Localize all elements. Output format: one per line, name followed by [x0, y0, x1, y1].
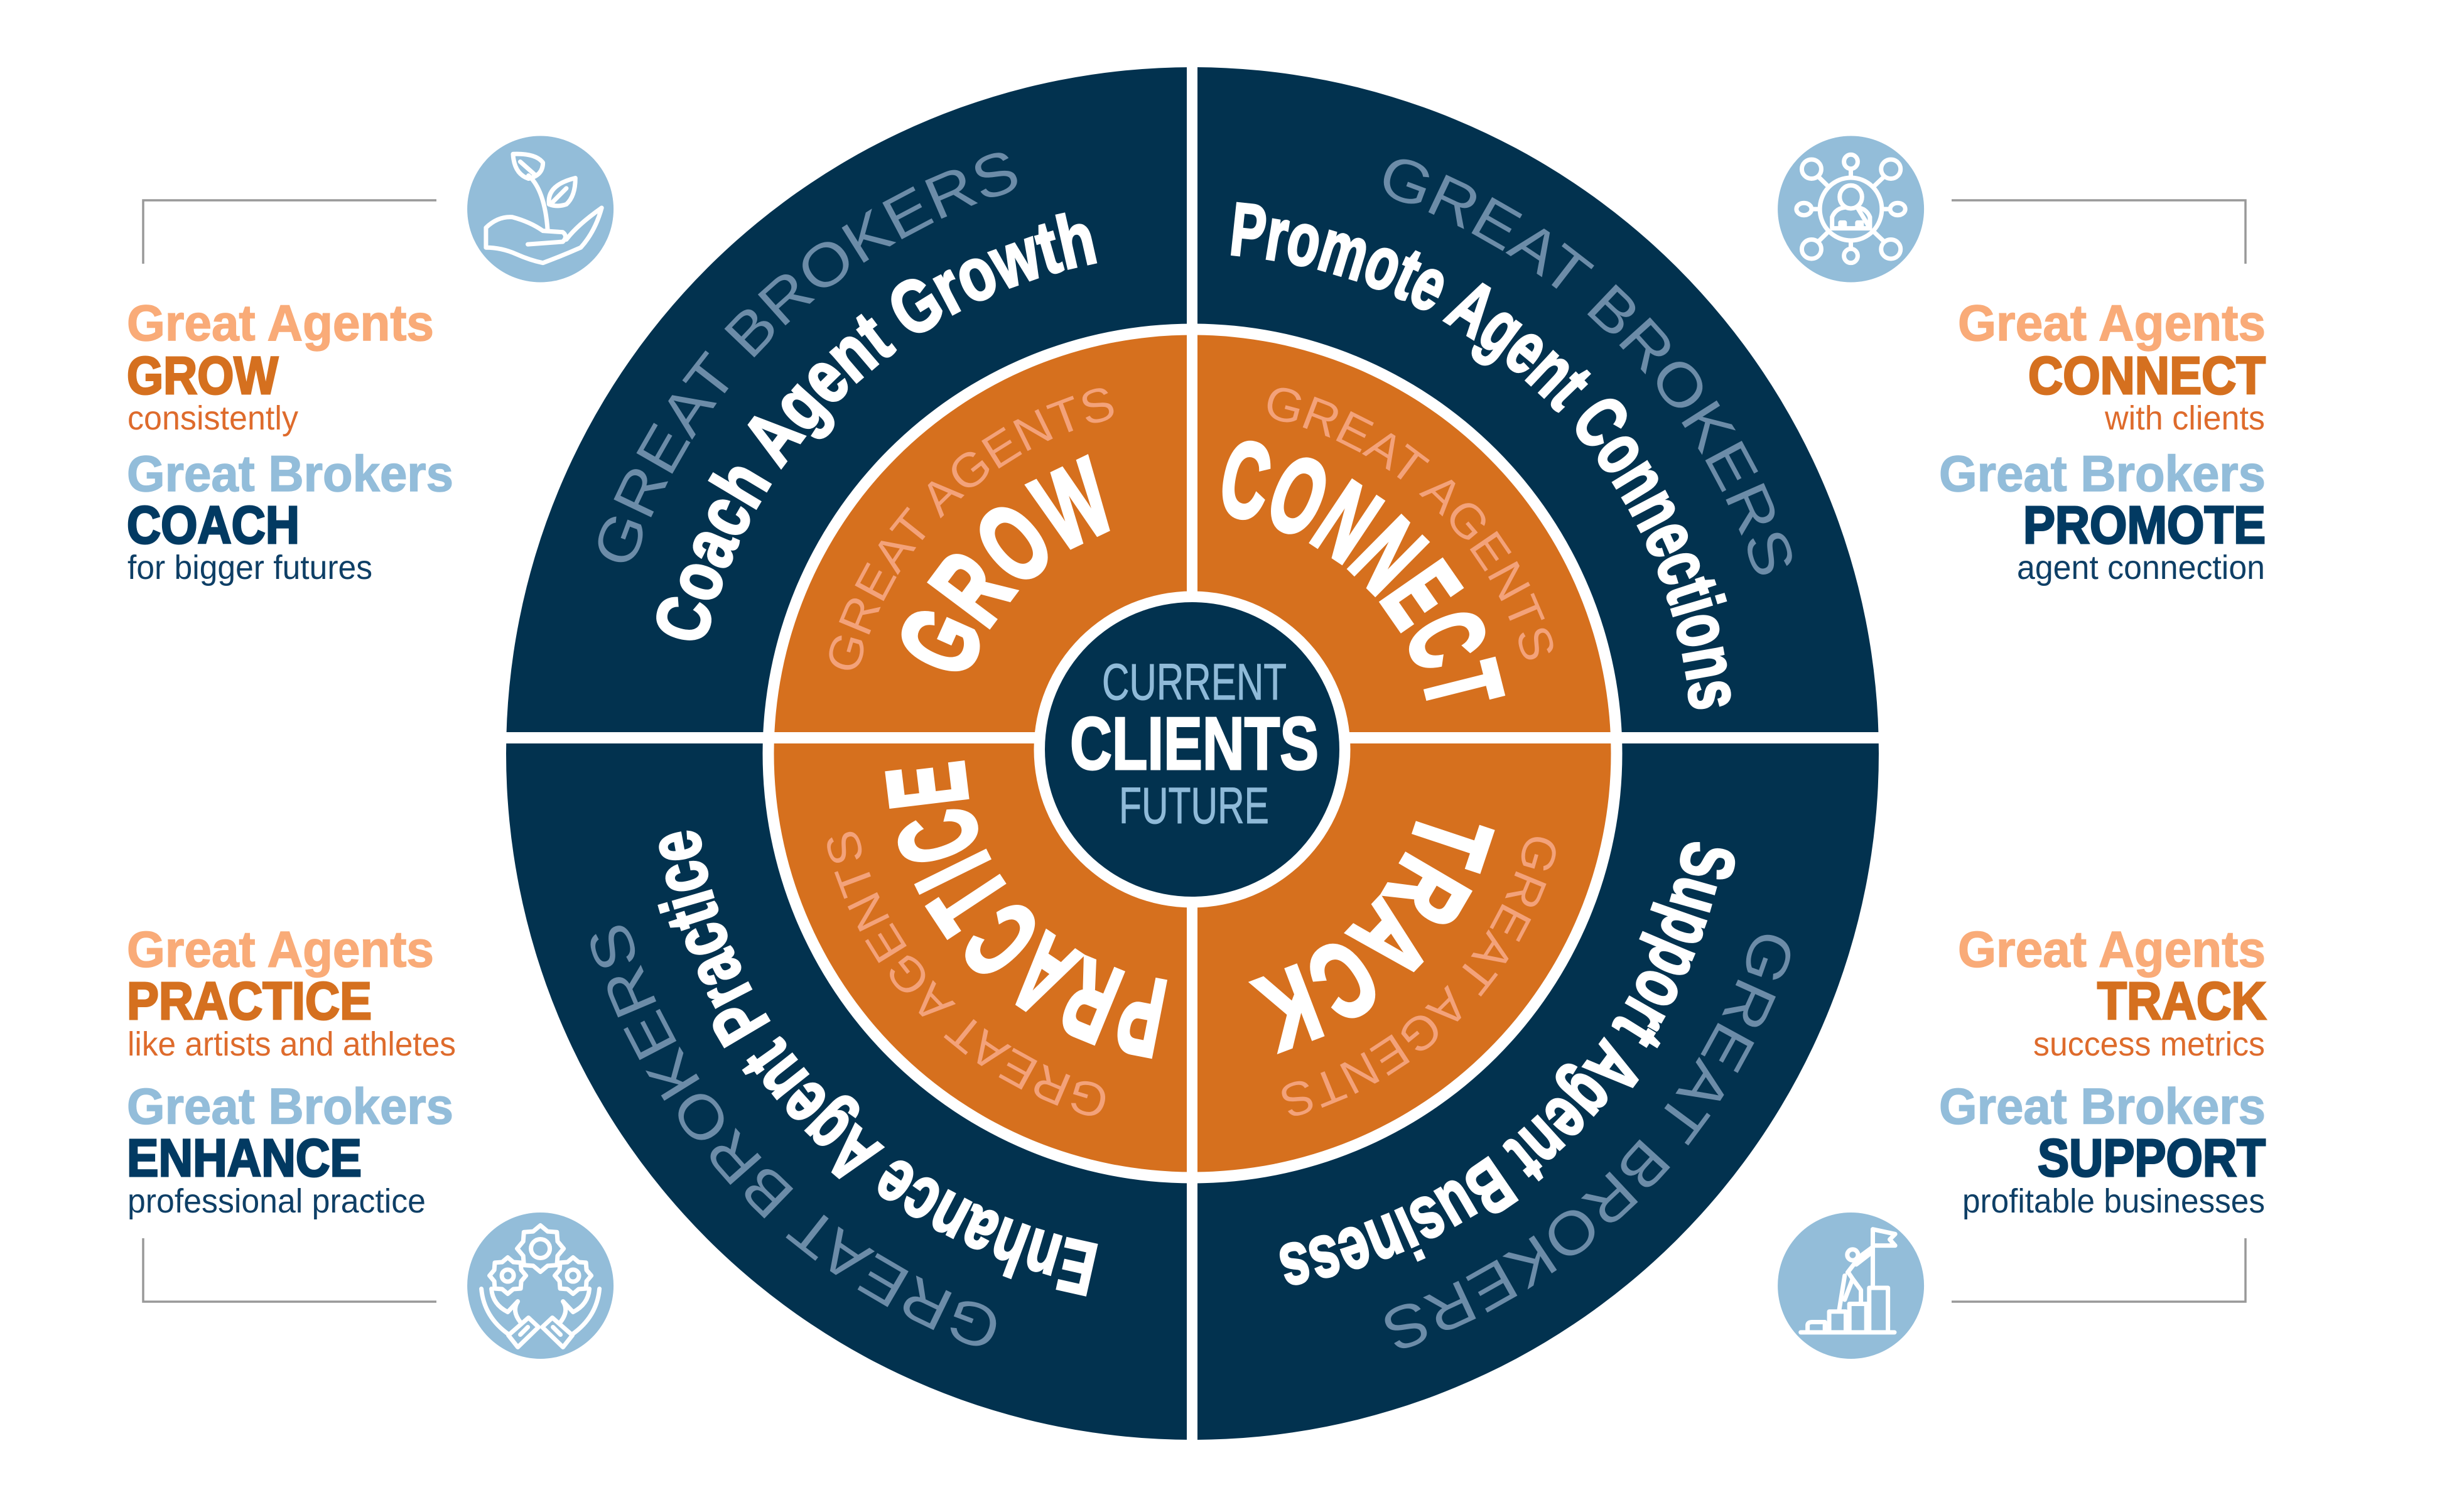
ring text: great brokers bottom left: GREAT BROKERS: [590, 926, 996, 1346]
ring text: great brokers bottom right: GREAT BROKERS: [1385, 934, 1791, 1349]
ring text: promote agent connections: Promote Agent Connections: [1231, 202, 1731, 710]
text block: practice and enhance: [127, 922, 456, 1220]
heading: great agents: Great Agents: [1958, 922, 2266, 978]
centre circle: [1034, 591, 1350, 908]
orange ring: great agents: [774, 335, 1611, 1172]
heading: great brokers: Great Brokers: [1939, 446, 2266, 502]
white ring separator: [762, 324, 1623, 1183]
keyword: connect: CONNECT: [2028, 346, 2266, 405]
icon: climber on bars with flag: [1778, 1213, 1924, 1359]
description: with clients: with clients: [2104, 399, 2265, 437]
wheel diagram: [506, 67, 1879, 1440]
heading: great brokers: Great Brokers: [127, 1079, 453, 1135]
heading: great brokers: Great Brokers: [127, 446, 453, 502]
heading: great brokers: Great Brokers: [1939, 1079, 2266, 1135]
ring text: great brokers top left: GREAT BROKERS: [598, 153, 1017, 563]
centre label: future: FUTURE: [1119, 777, 1269, 835]
heading: great agents: Great Agents: [127, 295, 434, 352]
keyword: support: SUPPORT: [2038, 1128, 2266, 1187]
icon: person network: [1778, 136, 1924, 283]
ring text: great agents top left: GREAT AGENTS: [829, 388, 1114, 670]
ring word: track: TRACK: [1248, 821, 1495, 1054]
ring text: great agents bottom right: GREAT AGENTS: [1282, 837, 1556, 1116]
keyword: coach: COACH: [127, 495, 300, 554]
text block: connect and promote: [1939, 295, 2266, 586]
ring text: support agent business: Support Agent Business: [1280, 842, 1736, 1285]
ring word: grow: GROW: [902, 454, 1110, 672]
centre label: current: CURRENT: [1102, 654, 1287, 711]
heading: great agents: Great Agents: [127, 922, 434, 978]
ring text: great brokers top right: GREAT BROKERS: [1384, 159, 1792, 575]
icon: hands holding gears: [467, 1213, 613, 1359]
description: consistently: consistently: [127, 399, 298, 437]
keyword: enhance: ENHANCE: [127, 1128, 362, 1187]
bracket: bottom right: [1952, 1238, 2245, 1302]
ring text: great agents top right: GREAT AGENTS: [1267, 388, 1554, 659]
bracket: bottom left: [143, 1238, 436, 1302]
ring word: practice: PRACTICE: [885, 760, 1167, 1059]
icon: hand holding seedling: [467, 136, 613, 283]
keyword: promote: PROMOTE: [2023, 495, 2266, 554]
text block: track and support: [1939, 922, 2266, 1220]
outer navy ring: great brokers: [506, 67, 1879, 1440]
ring text: great agents bottom left: GREAT AGENTS: [827, 831, 1105, 1116]
keyword: practice: PRACTICE: [127, 971, 372, 1030]
text block: grow and coach: [127, 295, 453, 586]
bracket: top right: [1952, 200, 2245, 264]
description: profitable businesses: profitable businesses: [1962, 1182, 2265, 1220]
description: professional practice: professional practice: [127, 1182, 426, 1220]
description: like artists and athletes: like artists and athletes: [127, 1025, 456, 1063]
description: for bigger futures: for bigger futures: [127, 549, 372, 586]
keyword: track: TRACK: [2097, 971, 2266, 1030]
ring text: coach agent growth: Coach Agent Growth: [656, 212, 1098, 640]
ring text: enhance agent practice: Enhance Agent Practice: [657, 830, 1098, 1297]
description: success metrics: success metrics: [2033, 1025, 2265, 1063]
centre label: clients: CLIENTS: [1070, 702, 1319, 786]
ring word: connect: CONNECT: [1222, 441, 1506, 701]
heading: great agents: Great Agents: [1958, 295, 2266, 352]
keyword: grow: GROW: [127, 346, 279, 405]
bracket: top left: [143, 200, 436, 264]
description: agent connection: agent connection: [2017, 549, 2265, 586]
